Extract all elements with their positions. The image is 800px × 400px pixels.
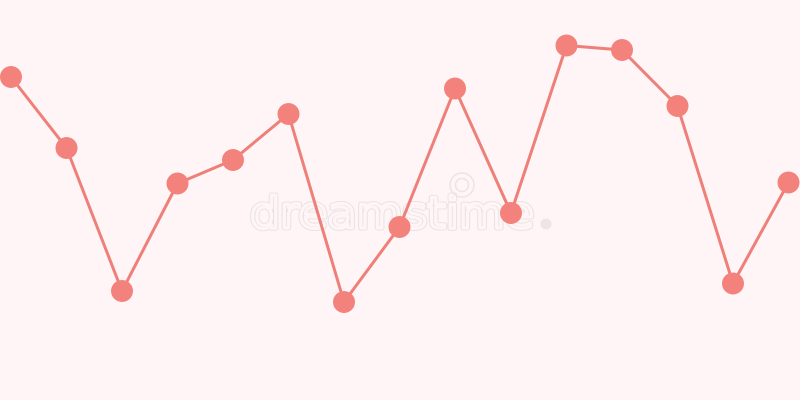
watermark: dreamstime: [250, 188, 534, 239]
watermark: dreamstime: [250, 188, 534, 239]
line chart: data points: [0, 34, 800, 313]
line chart: connecting line: [11, 46, 788, 302]
watermark: [250, 173, 552, 239]
